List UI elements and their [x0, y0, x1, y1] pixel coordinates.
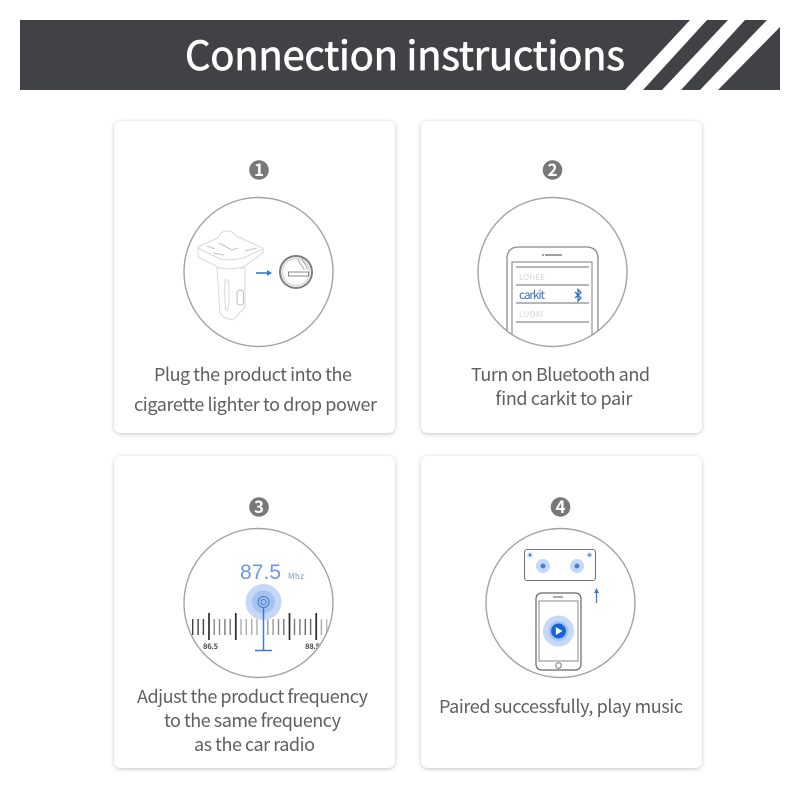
- frequency readout: 87.5: [240, 561, 281, 584]
- scale label: 86.5: [203, 641, 219, 652]
- caption: to the same frequency: [164, 707, 342, 733]
- caption: cigarette lighter to drop power: [134, 391, 378, 417]
- illustration circle: [486, 528, 635, 678]
- frequency readout: [240, 561, 304, 584]
- list item: LUOXI: [519, 309, 543, 320]
- panel: step 2: [421, 121, 702, 433]
- title: Connection instructions: [185, 24, 625, 82]
- step number 2: 2: [547, 156, 558, 181]
- tuning scale: [193, 613, 327, 652]
- panel: step 4: [421, 456, 702, 768]
- illustration circle: [184, 528, 333, 678]
- caption: Plug the product into the: [154, 361, 352, 387]
- step number 1: [249, 156, 269, 181]
- list item: LOHEE: [519, 272, 545, 283]
- panel: step 1: [114, 121, 395, 433]
- caption: Turn on Bluetooth and: [471, 361, 650, 387]
- panel: step 3: [114, 456, 395, 768]
- header banner: [20, 20, 780, 90]
- step number 4: [551, 493, 570, 518]
- frequency readout: Mhz: [288, 571, 304, 582]
- icon: cigarette lighter: [280, 256, 312, 288]
- icon: car charger: [198, 231, 263, 320]
- caption: [137, 683, 369, 757]
- arrow up: [594, 588, 599, 603]
- caption: as the car radio: [194, 731, 315, 757]
- scale label: 88.5: [305, 641, 321, 652]
- icon: phone playing music: [536, 593, 581, 670]
- step number 3: 3: [254, 493, 264, 518]
- step number 2: [543, 156, 562, 181]
- icon: transmitter with speakers: [524, 550, 596, 580]
- icon: bluetooth: [575, 290, 581, 301]
- step number 4: 4: [555, 493, 566, 518]
- icon: phone with device list: [506, 246, 599, 334]
- selected list item: carkit: [519, 286, 545, 303]
- step number 3: [249, 493, 269, 518]
- caption: [134, 361, 378, 417]
- step number 1: 1: [254, 156, 264, 181]
- caption: [471, 361, 650, 411]
- arrow to socket: [256, 270, 272, 276]
- illustration circle: [184, 198, 333, 346]
- illustration circle: [478, 198, 627, 346]
- caption: Paired successfully, play music: [439, 693, 683, 719]
- tuning needle: [246, 584, 282, 650]
- caption: Adjust the product frequency: [137, 683, 369, 709]
- caption: find carkit to pair: [495, 385, 633, 411]
